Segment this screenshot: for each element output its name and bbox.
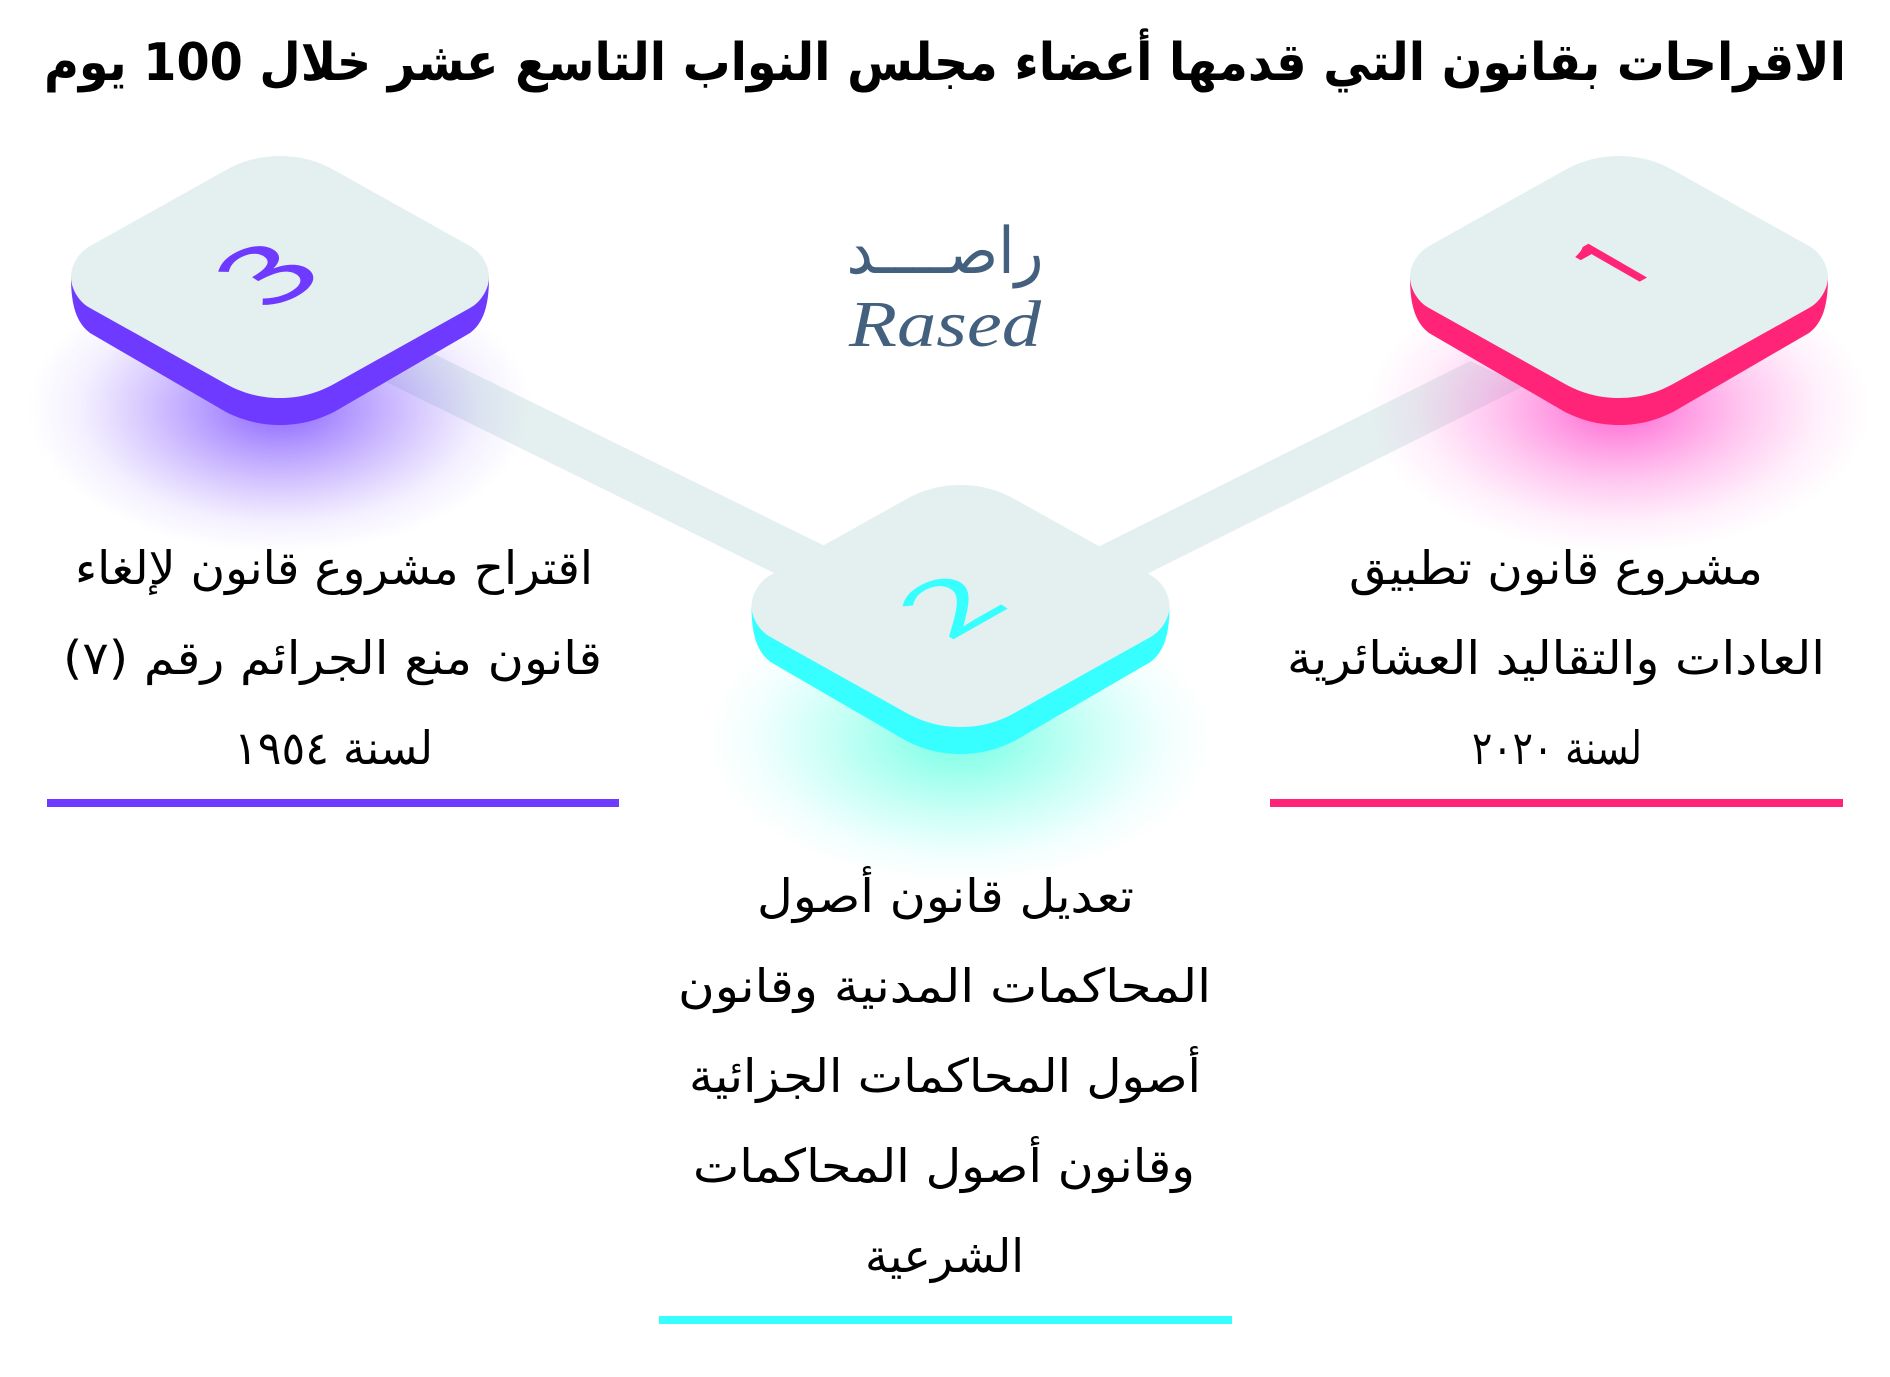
text block: pink: العادات والتقاليد العشائرية bbox=[1287, 631, 1825, 686]
text block: purple: اقتراح مشروع قانون لإلغاء bbox=[75, 541, 593, 596]
text block: pink: لسنة ٢٠٢٠ bbox=[1472, 721, 1642, 775]
number 3: 3 bbox=[168, 210, 356, 329]
text block: purple: قانون منع الجرائم رقم (٧) bbox=[63, 631, 602, 686]
text block: cyan: أصول المحاكمات الجزائية bbox=[689, 1046, 1201, 1104]
number 1: 1 bbox=[1518, 209, 1702, 315]
block top bbox=[1410, 156, 1828, 398]
block side bbox=[752, 606, 1170, 754]
block 3: purple bbox=[71, 156, 489, 425]
underline: cyan bbox=[659, 1316, 1232, 1324]
text block: purple bbox=[63, 541, 602, 775]
block 1: pink bbox=[1410, 156, 1828, 425]
number 2: 2 bbox=[854, 543, 1037, 658]
logo latin: Rased bbox=[848, 288, 1042, 361]
text block: cyan: وقانون أصول المحاكمات bbox=[693, 1136, 1195, 1194]
logo bbox=[846, 215, 1044, 361]
text block: pink: مشروع قانون تطبيق bbox=[1349, 541, 1763, 596]
underline: purple bbox=[47, 799, 619, 807]
text block: cyan: الشرعية bbox=[865, 1229, 1024, 1284]
logo arabic: راصــــد bbox=[846, 215, 1044, 289]
connector: right bar bbox=[1098, 361, 1524, 574]
block side bbox=[1410, 277, 1828, 425]
text block: cyan bbox=[678, 866, 1211, 1284]
underline: pink bbox=[1270, 799, 1843, 807]
text block: cyan: تعديل قانون أصول bbox=[757, 866, 1134, 924]
block 2: cyan bbox=[752, 485, 1170, 754]
glow: cyan bbox=[708, 593, 1212, 883]
glow: purple bbox=[28, 263, 532, 553]
text block: pink bbox=[1287, 541, 1825, 775]
glow: pink bbox=[1367, 263, 1871, 553]
block side bbox=[71, 277, 489, 425]
block top bbox=[71, 156, 489, 398]
text block: cyan: المحاكمات المدنية وقانون bbox=[678, 959, 1211, 1014]
text block: purple: لسنة ١٩٥٤ bbox=[234, 721, 433, 775]
block top bbox=[752, 485, 1170, 727]
connector: left bar bbox=[386, 354, 825, 574]
